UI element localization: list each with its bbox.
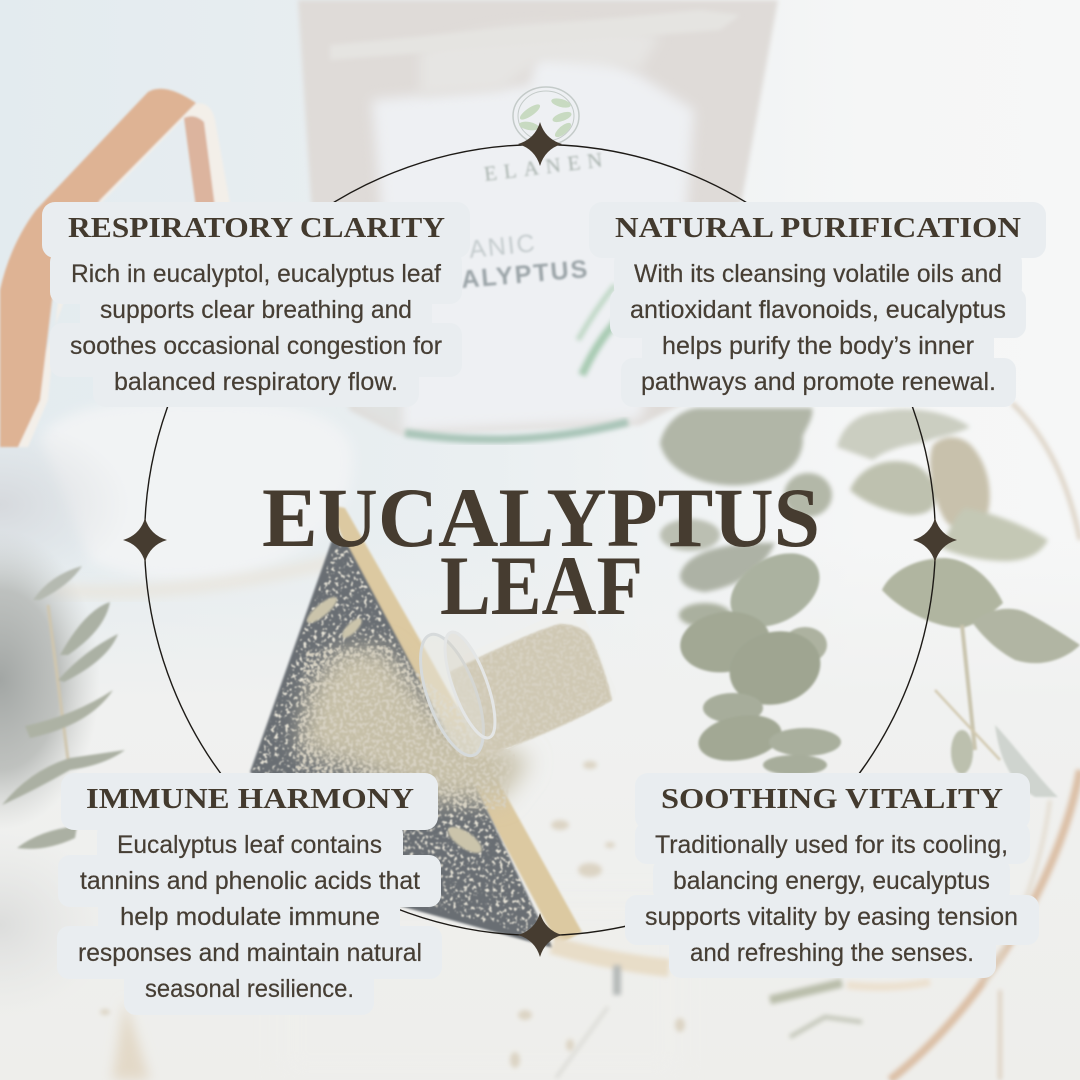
body text: responses and maintain natural	[78, 939, 422, 967]
body text: Traditionally used for its cooling,	[655, 831, 1008, 859]
body text: and refreshing the senses.	[690, 939, 974, 967]
body text: Eucalyptus leaf contains	[117, 831, 382, 859]
star: right	[913, 518, 957, 562]
star: bottom	[518, 913, 562, 957]
body text	[70, 260, 442, 396]
heading: IMMUNE HARMONY	[86, 783, 414, 815]
circle outline	[144, 144, 936, 936]
title: EUCALYPTUS	[262, 471, 820, 565]
wooden ring and marble veins	[552, 403, 1080, 1080]
body text	[645, 831, 1018, 967]
body text	[630, 260, 1006, 396]
far-left leaves	[0, 530, 220, 1080]
heading: SOOTHING VITALITY	[661, 783, 1003, 815]
pouch	[298, 0, 778, 439]
body text: pathways and promote renewal.	[641, 368, 996, 396]
pouch lettering: ALYPTUS	[460, 255, 590, 294]
body text: helps purify the body’s inner	[662, 332, 974, 360]
body text: seasonal resilience.	[145, 975, 354, 1003]
star: top	[518, 122, 562, 166]
eucalyptus leaves: right branch	[837, 409, 1048, 561]
tan handle	[0, 89, 232, 447]
heading: RESPIRATORY CLARITY	[68, 212, 445, 244]
star: left	[123, 518, 167, 562]
eucalyptus leaves: centre branch	[660, 408, 832, 627]
panel: respiratory clarity	[42, 202, 470, 407]
body text: balanced respiratory flow.	[114, 368, 398, 396]
spilled herb pile	[295, 593, 530, 858]
body text: soothes occasional congestion for	[70, 332, 442, 360]
panel: immune harmony	[57, 773, 442, 1015]
panel: natural purification	[589, 202, 1046, 407]
body text: supports clear breathing and	[100, 296, 412, 324]
heading: NATURAL PURIFICATION	[615, 212, 1021, 244]
pouch lettering: ANIC	[468, 229, 538, 264]
glass jar	[408, 604, 620, 763]
dark triangular board	[250, 505, 582, 948]
pouch logo	[513, 87, 579, 145]
marble specks	[100, 761, 685, 1068]
title	[262, 471, 820, 633]
pouch lettering	[460, 147, 611, 294]
body text: tannins and phenolic acids that	[80, 867, 420, 895]
panel: soothing vitality	[625, 773, 1039, 978]
pouch lettering: ELANEN	[483, 147, 611, 186]
body text: balancing energy, eucalyptus	[673, 867, 990, 895]
white bowl	[0, 400, 352, 592]
body text: help modulate immune	[120, 903, 380, 931]
body text	[78, 831, 422, 1003]
body text: With its cleansing volatile oils and	[634, 260, 1002, 288]
title: LEAF	[440, 539, 643, 633]
body text: antioxidant flavonoids, eucalyptus	[630, 296, 1006, 324]
body text: supports vitality by easing tension	[645, 903, 1018, 931]
body text: Rich in eucalyptol, eucalyptus leaf	[71, 260, 441, 288]
